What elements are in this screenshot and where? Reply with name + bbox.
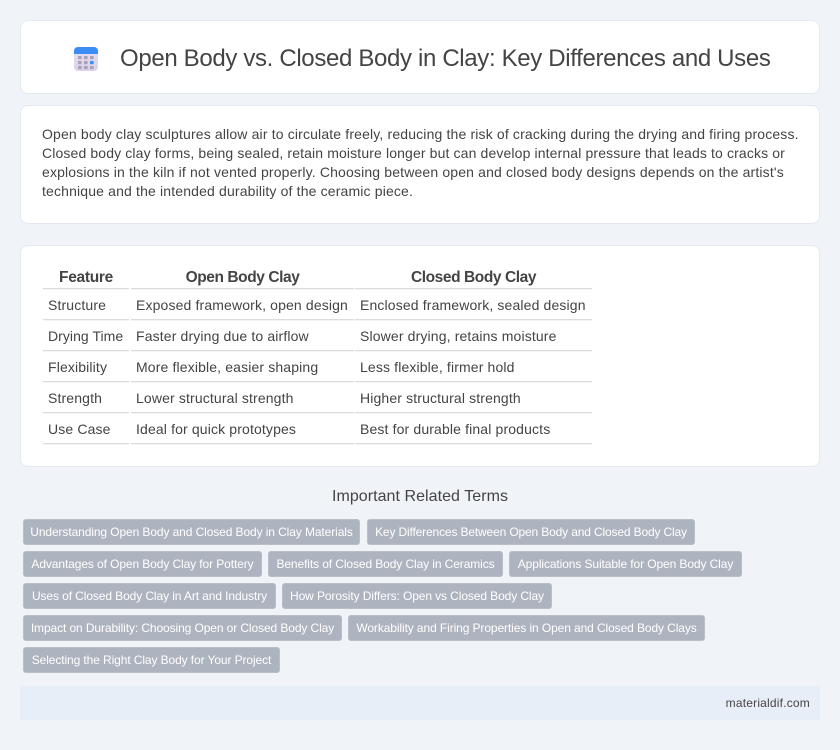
icon: calendar bbox=[74, 47, 98, 71]
tag bbox=[23, 551, 262, 577]
title: Open Body vs. Closed Body in Clay: Key Differences and Uses bbox=[120, 45, 770, 72]
tag bbox=[268, 551, 503, 577]
footer bar bbox=[20, 686, 820, 720]
tag bbox=[509, 551, 742, 577]
tag bbox=[23, 583, 276, 609]
use case open: Ideal for quick prototypes bbox=[136, 421, 296, 437]
paragraph line 3: explosions in the kiln if not vented properly. Choosing between open and closed body designs depends on the artist's bbox=[42, 164, 784, 180]
tag: How Porosity Differs: Open vs Closed Body Clay bbox=[290, 589, 544, 603]
tag: Benefits of Closed Body Clay in Ceramics bbox=[276, 557, 495, 571]
row: drying time: Drying Time bbox=[48, 328, 123, 344]
related terms tags bbox=[23, 519, 742, 673]
row: use case: Use Case bbox=[48, 421, 111, 437]
tag bbox=[23, 647, 280, 673]
flexibility open: More flexible, easier shaping bbox=[136, 359, 318, 375]
strength open: Lower structural strength bbox=[136, 390, 294, 406]
tag: Impact on Durability: Choosing Open or Closed Body Clay bbox=[31, 621, 334, 635]
drying closed: Slower drying, retains moisture bbox=[360, 328, 557, 344]
tag bbox=[282, 583, 552, 609]
strength closed: Higher structural strength bbox=[360, 390, 521, 406]
table header: feature: Feature bbox=[59, 269, 113, 286]
tag: Applications Suitable for Open Body Clay bbox=[518, 557, 733, 571]
paragraph line 2: Closed body clay forms, being sealed, retain moisture longer but can develop internal pressure that leads to cracks or bbox=[42, 145, 785, 161]
structure closed: Enclosed framework, sealed design bbox=[360, 297, 586, 313]
row: flexibility: Flexibility bbox=[48, 359, 107, 375]
tag bbox=[23, 519, 360, 545]
footer source text: materialdif.com bbox=[726, 696, 810, 710]
tag: Understanding Open Body and Closed Body in Clay Materials bbox=[30, 525, 353, 539]
tag bbox=[367, 519, 695, 545]
structure open: Exposed framework, open design bbox=[136, 297, 348, 313]
intro text panel bbox=[20, 105, 820, 224]
row: strength: Strength bbox=[48, 390, 102, 406]
related terms heading: Important Related Terms bbox=[332, 488, 508, 505]
use case closed: Best for durable final products bbox=[360, 421, 550, 437]
tag: Key Differences Between Open Body and Closed Body Clay bbox=[375, 525, 687, 539]
flexibility closed: Less flexible, firmer hold bbox=[360, 359, 515, 375]
paragraph line 4: technique and the intended durability of the ceramic piece. bbox=[42, 183, 413, 199]
tag: Advantages of Open Body Clay for Pottery bbox=[31, 557, 254, 571]
row: structure: Structure bbox=[48, 297, 106, 313]
header panel bbox=[20, 20, 820, 94]
drying open: Faster drying due to airflow bbox=[136, 328, 309, 344]
comparison table panel bbox=[20, 245, 820, 467]
tag: Selecting the Right Clay Body for Your Project bbox=[32, 653, 271, 667]
tag: Workability and Firing Properties in Open and Closed Body Clays bbox=[356, 621, 697, 635]
tag bbox=[23, 615, 342, 641]
table header: open body clay: Open Body Clay bbox=[186, 269, 299, 286]
tag bbox=[348, 615, 705, 641]
table header: closed body clay: Closed Body Clay bbox=[411, 269, 536, 286]
paragraph line 1: Open body clay sculptures allow air to circulate freely, reducing the risk of cracking during the drying and firing process. bbox=[42, 126, 799, 142]
tag: Uses of Closed Body Clay in Art and Industry bbox=[32, 589, 267, 603]
